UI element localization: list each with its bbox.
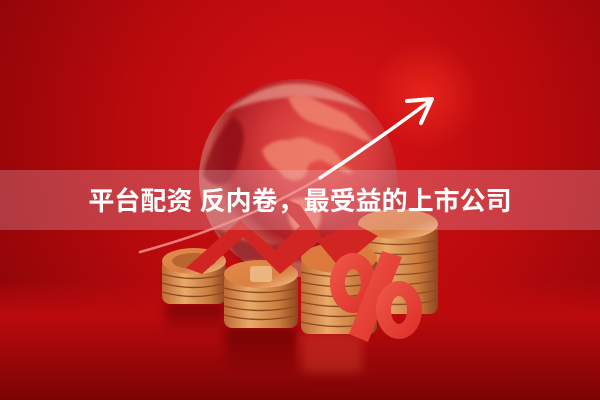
title band <box>0 170 600 230</box>
rising white arrow <box>140 99 432 252</box>
icon: percent sign <box>330 251 422 342</box>
globe top highlight <box>225 84 370 112</box>
coin stack far right <box>358 209 438 314</box>
coin stack left <box>162 248 226 304</box>
coin stack middle <box>224 260 298 328</box>
zigzag red arrow <box>186 192 378 274</box>
icon: globe <box>199 79 397 277</box>
title band: 平台配资 反内卷，最受益的上市公司 <box>88 186 512 216</box>
globe dark landmass <box>203 117 244 185</box>
floor reflections beneath coins <box>165 303 362 377</box>
coin stack right of centre <box>301 243 377 334</box>
globe continents <box>262 95 374 230</box>
globe dark lower shadow <box>212 225 384 261</box>
